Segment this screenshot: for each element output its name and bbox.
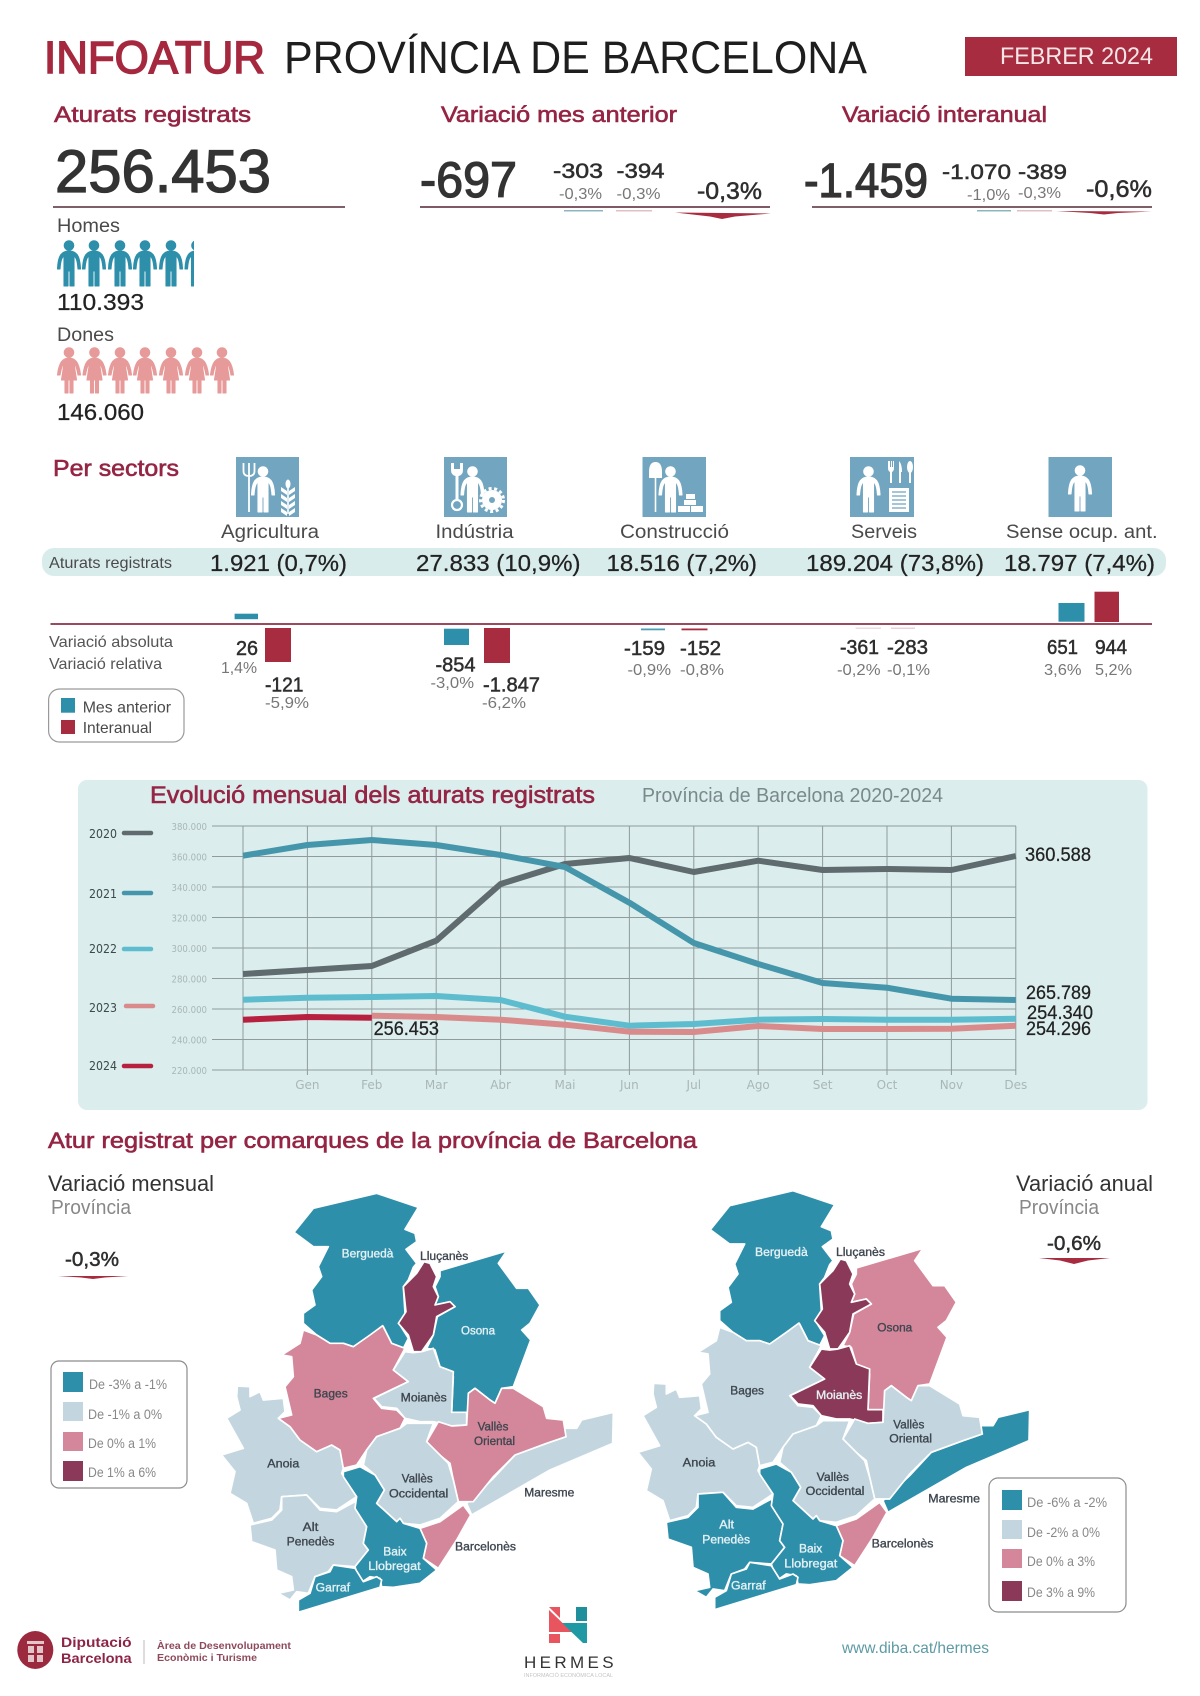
values: sense ocupació anterior — [1044, 637, 1132, 679]
chart subtitle: Província de Barcelona 2020-2024 — [642, 785, 943, 807]
legend: variació anual: De -2% a 0% — [1027, 1524, 1100, 1540]
values: construcció: -159 — [624, 638, 665, 660]
sector names: Sense ocup. ant. — [1006, 522, 1158, 543]
values: sense ocupació anterior: 651 — [1047, 637, 1078, 659]
values: agricultura: -5,9% — [265, 695, 309, 712]
values: sense ocupació anterior: 5,2% — [1095, 662, 1132, 679]
women figures — [616, 160, 665, 212]
logo: Diputació Barcelona: Barcelona — [61, 1650, 132, 1666]
values: construcció: -152 — [680, 638, 721, 660]
legend: variació anual: De 0% a 3% — [1027, 1553, 1095, 1569]
sector names — [221, 522, 1158, 543]
panel: variació mensual — [48, 1171, 214, 1279]
men figures: -1,0% — [967, 187, 1010, 204]
bar chart: variació per sector — [50, 592, 1152, 663]
x axis labels: Oct — [877, 1078, 898, 1092]
map labels: Baix — [799, 1544, 823, 1556]
legend: sectors — [49, 689, 184, 742]
icon: construcció — [642, 457, 706, 517]
legend: variació anual: De 3% a 9% — [1027, 1584, 1095, 1600]
map labels: Maresme — [928, 1494, 980, 1506]
sector names: Agricultura — [221, 522, 319, 543]
men figures: -303 — [553, 160, 603, 183]
values: agricultura: 1,4% — [221, 660, 257, 677]
dones figure: 146.060 — [57, 399, 144, 425]
legend: variació anual — [989, 1478, 1126, 1612]
total percentage — [1056, 176, 1152, 214]
values: indústria: -854 — [436, 655, 476, 677]
values: agricultura — [221, 638, 309, 712]
chart heading: Evolució mensual dels aturats registrats — [150, 782, 595, 809]
panel: variació anual — [1016, 1171, 1153, 1264]
men figures — [942, 161, 1011, 212]
heading: comarques: Atur registrat per comarques de la província de Barcelona — [48, 1128, 698, 1153]
map labels: Anoia — [683, 1458, 716, 1470]
logo: Hermes: HERMES — [524, 1653, 614, 1672]
y axis labels: 340.000 — [172, 883, 207, 894]
map labels: Vallès — [478, 1422, 509, 1434]
row labels — [49, 634, 173, 673]
logo: Hermes — [524, 1607, 614, 1679]
values: agricultura: -121 — [265, 675, 304, 697]
year legend: 2023 — [89, 1000, 117, 1015]
map labels: Garraf — [316, 1583, 351, 1595]
heading: aturats registrats: Aturats registrats — [54, 102, 251, 127]
y axis labels: 380.000 — [172, 822, 207, 833]
men figures: -0,3% — [559, 186, 602, 203]
x axis labels: Gen — [295, 1078, 320, 1092]
map labels: Baix — [383, 1547, 407, 1559]
map labels: Bages — [730, 1385, 764, 1397]
icon: women pictogram — [58, 348, 234, 393]
women figures: -0,3% — [1018, 185, 1061, 202]
map labels: Berguedà — [342, 1249, 394, 1261]
map labels — [267, 1249, 574, 1595]
date badge: FEBRER 2024 — [1000, 43, 1153, 70]
main figure: -697 — [420, 152, 517, 208]
map labels: Occidental — [806, 1486, 864, 1498]
x axis labels: Set — [813, 1078, 833, 1092]
x axis labels: Jun — [619, 1078, 639, 1092]
panel: variació mensual: Província — [51, 1197, 132, 1219]
values: indústria: -3,0% — [430, 675, 474, 692]
band: aturats registrats per sector: 189.204 (73,8%) — [806, 550, 984, 576]
y axis labels: 240.000 — [172, 1036, 207, 1046]
map labels: Garraf — [731, 1580, 767, 1592]
values: serveis: -283 — [887, 637, 928, 659]
map labels: Oriental — [474, 1436, 515, 1448]
total percentage: -0,6% — [1086, 176, 1152, 203]
y axis labels: 220.000 — [172, 1066, 207, 1077]
panel: variació interanual — [804, 102, 1152, 214]
icon: sense ocupació anterior — [1048, 457, 1112, 517]
y axis labels: 360.000 — [172, 852, 207, 864]
title — [44, 32, 867, 83]
panel: per sectors — [42, 455, 1166, 742]
series values: 360.588 — [1025, 845, 1091, 866]
values: serveis: -0,1% — [887, 662, 930, 679]
series values: 256.453 — [374, 1019, 439, 1040]
map labels: Berguedà — [755, 1247, 808, 1259]
icon: agricultura — [236, 457, 299, 517]
total figure: 256.453 — [55, 138, 271, 205]
row labels: Variació absoluta — [49, 634, 173, 651]
heading: variació interanual: Variació interanual — [842, 102, 1047, 127]
map labels: Bages — [314, 1388, 348, 1400]
series values: 254.296 — [1026, 1019, 1091, 1040]
map labels: Barcelonès — [872, 1539, 934, 1551]
x axis labels: Feb — [361, 1078, 382, 1092]
map labels: Penedès — [702, 1534, 750, 1546]
total percentage — [675, 178, 771, 219]
main figure: -1.459 — [804, 155, 928, 208]
women figures: -394 — [616, 160, 665, 183]
map labels: Llobregat — [368, 1561, 421, 1573]
icon: indústria — [444, 457, 507, 517]
x axis labels: Mar — [425, 1078, 448, 1092]
map: variació mensual — [222, 1193, 613, 1612]
band: aturats registrats per sector — [42, 548, 1166, 576]
x axis labels: Des — [1004, 1078, 1027, 1092]
logo: Diputació Barcelona: Econòmic i Turisme — [157, 1652, 257, 1664]
map labels: Vallès — [817, 1472, 849, 1484]
map labels: Moianès — [816, 1390, 863, 1402]
women figures: -389 — [1018, 161, 1067, 184]
logo: Hermes: INFORMACIÓ ECONÒMICA LOCAL — [524, 1672, 613, 1679]
sector names: Construcció — [620, 522, 729, 543]
sector names: Indústria — [436, 522, 514, 543]
legend: variació mensual: De -3% a -1% — [89, 1376, 167, 1392]
values: agricultura: 26 — [236, 638, 258, 660]
map labels — [683, 1247, 980, 1592]
x axis labels: Jul — [686, 1078, 701, 1092]
values: serveis — [837, 637, 930, 679]
values: sense ocupació anterior: 944 — [1095, 637, 1127, 659]
values: serveis: -361 — [840, 637, 879, 659]
y axis labels: 320.000 — [172, 914, 207, 924]
total percentage: -0,3% — [697, 178, 762, 205]
x axis labels: Ago — [747, 1078, 770, 1092]
x axis labels: Abr — [490, 1078, 511, 1092]
map labels: Maresme — [524, 1488, 574, 1500]
year legend: 2024 — [89, 1058, 117, 1073]
logo: Diputació Barcelona — [17, 1631, 291, 1669]
series values — [374, 845, 1093, 1040]
values: sense ocupació anterior: 3,6% — [1044, 662, 1082, 679]
homes label: Homes — [57, 216, 120, 237]
map labels: Alt — [719, 1519, 735, 1531]
map labels: Alt — [303, 1522, 319, 1534]
women figures — [1017, 161, 1067, 212]
map labels: Osona — [461, 1325, 496, 1337]
x axis labels: Mai — [554, 1078, 576, 1092]
logo: Diputació Barcelona: Diputació — [61, 1634, 132, 1650]
map labels: Lluçanès — [420, 1251, 469, 1263]
map labels: Anoia — [267, 1458, 300, 1470]
date badge — [965, 37, 1177, 76]
title: PROVÍNCIA DE BARCELONA — [284, 32, 867, 83]
legend: variació mensual: De -1% a 0% — [88, 1406, 162, 1422]
panel: variació anual: -0,6% — [1047, 1233, 1101, 1255]
year legend: 2020 — [89, 826, 117, 841]
band: aturats registrats per sector: 18.797 (7,4%) — [1004, 550, 1155, 576]
map labels: Vallès — [893, 1419, 925, 1431]
women figures: -0,3% — [616, 186, 660, 203]
map: variació anual — [638, 1191, 1030, 1610]
website link: www.diba.cat/hermes — [841, 1640, 989, 1657]
x axis labels: Nov — [940, 1078, 963, 1092]
dones label: Dones — [57, 325, 114, 346]
row labels: Variació relativa — [49, 656, 162, 673]
series values: 265.789 — [1026, 983, 1091, 1004]
heading: per sectors: Per sectors — [53, 455, 179, 481]
map labels: Oriental — [889, 1434, 932, 1446]
map labels: Barcelonès — [455, 1542, 516, 1554]
map labels: Osona — [877, 1323, 913, 1335]
y axis labels: 300.000 — [172, 944, 207, 955]
band: aturats registrats per sector: 1.921 (0,7%) — [210, 550, 347, 576]
men figures: -1.070 — [942, 161, 1011, 184]
homes figure: 110.393 — [57, 289, 144, 315]
legend: sectors: Mes anterior — [83, 700, 172, 717]
legend: variació mensual: De 0% a 1% — [88, 1435, 156, 1451]
band: aturats registrats per sector: Aturats registrats — [49, 555, 172, 572]
values: serveis: -0,2% — [837, 662, 880, 679]
logo: Diputació Barcelona: Àrea de Desenvolupament — [157, 1639, 291, 1652]
y axis labels — [172, 822, 207, 1077]
series values: 254.340 — [1027, 1003, 1093, 1024]
legend: variació mensual: De 1% a 6% — [88, 1464, 156, 1480]
panel: variació anual: Variació anual — [1016, 1171, 1153, 1196]
title: INFOATUR — [44, 32, 265, 83]
year legend — [89, 826, 153, 1073]
values: construcció: -0,8% — [680, 662, 724, 679]
panel: aturats registrats — [53, 102, 345, 425]
map labels: Moianès — [401, 1393, 447, 1405]
legend: variació mensual — [51, 1361, 187, 1488]
x axis labels — [295, 1078, 1027, 1092]
legend: sectors: Interanual — [83, 720, 152, 737]
values: indústria: -6,2% — [482, 695, 526, 712]
panel: variació mes anterior — [420, 102, 771, 219]
values: construcció: -0,9% — [628, 662, 671, 679]
icon: men pictogram — [58, 241, 208, 286]
year legend: 2022 — [89, 941, 117, 956]
map labels: Vallès — [402, 1474, 433, 1486]
band: aturats registrats per sector: 27.833 (10,9%) — [416, 550, 580, 576]
legend: variació anual: De -6% a -2% — [1027, 1494, 1107, 1510]
map labels: Penedès — [287, 1537, 335, 1549]
values: construcció — [624, 638, 724, 679]
heading: variació mes anterior: Variació mes anterior — [441, 102, 677, 127]
line chart series — [243, 840, 1016, 1032]
icon: serveis — [850, 457, 914, 517]
panel: variació anual: Província — [1019, 1197, 1100, 1219]
map labels: Occidental — [389, 1488, 448, 1500]
panel: variació mensual: Variació mensual — [48, 1171, 214, 1196]
sector names: Serveis — [851, 522, 917, 543]
map labels: Lluçanès — [836, 1247, 885, 1259]
panel: variació mensual: -0,3% — [65, 1249, 119, 1271]
men figures — [553, 160, 603, 212]
band: aturats registrats per sector: 18.516 (7,2%) — [606, 550, 757, 576]
y axis labels: 280.000 — [172, 974, 207, 986]
year legend: 2021 — [89, 886, 117, 901]
values: indústria — [430, 655, 540, 712]
y axis labels: 260.000 — [172, 1005, 207, 1016]
values: indústria: -1.847 — [483, 675, 540, 697]
panel: evolució mensual — [78, 780, 1148, 1110]
map labels: Llobregat — [784, 1558, 838, 1570]
